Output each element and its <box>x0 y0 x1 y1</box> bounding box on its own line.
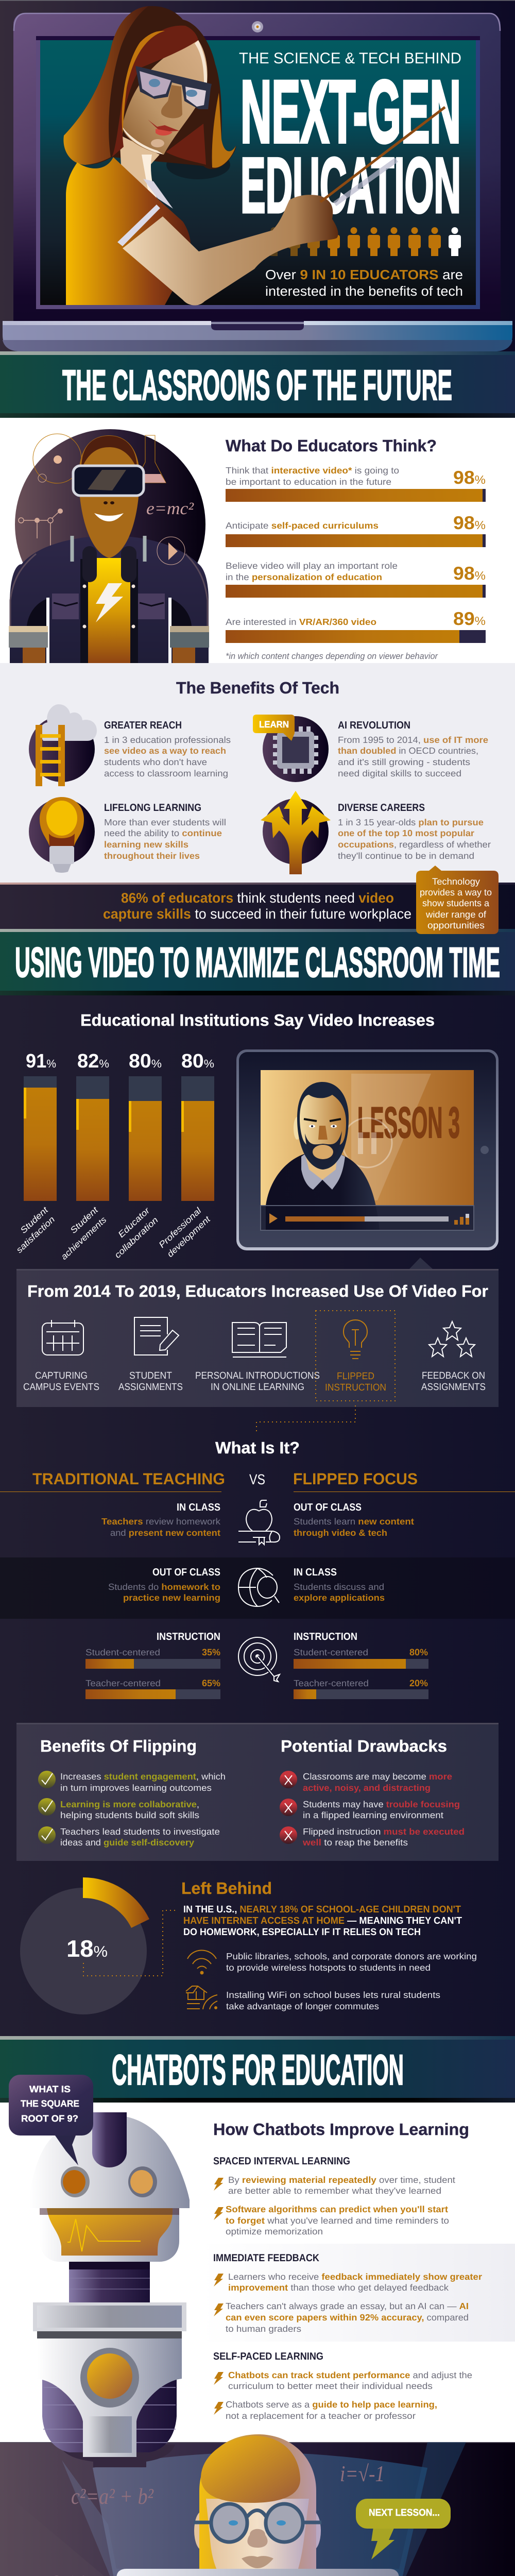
chart: flipped instruction split <box>294 1631 428 1699</box>
label: feedback on assignments <box>421 1370 486 1393</box>
icon: globe and magnifier <box>238 1568 279 1606</box>
icon: light bulb <box>29 797 95 873</box>
stat: personalization 98%: 98% <box>453 563 486 584</box>
scene: student at laptop <box>0 2442 515 2576</box>
bar chart: video increases <box>14 1050 214 1262</box>
diverse careers: occupations , regardless of whether <box>338 839 491 850</box>
label: flipped instruction: FLIPPED <box>337 1371 374 1382</box>
speech bubble: square root: WHAT IS <box>29 2084 71 2094</box>
illustration: student in VR headset <box>9 429 209 663</box>
sleeve gaps <box>27 599 47 626</box>
icon: open book <box>232 1323 286 1357</box>
header background <box>0 0 515 351</box>
row: flipped in class: Students discuss and <box>294 1582 384 1592</box>
hero title <box>239 50 461 229</box>
stat: self-paced curriculums 98%: Anticipate self-paced curriculums <box>226 520 379 531</box>
left behind text: DO HOMEWORK, ESPECIALLY IF IT RELIES ON TECH <box>183 1927 421 1938</box>
illustration: tablet with video lesson <box>236 1049 499 1250</box>
row: flipped in class: explore applications <box>294 1592 385 1603</box>
row: traditional out of class <box>108 1567 220 1603</box>
self-paced learning <box>213 2351 472 2421</box>
collar <box>33 2302 186 2331</box>
self-paced learning: Chatbots serve as a guide to help pace learning, <box>226 2399 437 2410</box>
row: flipped out of class: OUT OF CLASS <box>294 1502 362 1513</box>
left behind text: IN THE U.S., NEARLY 18% OF SCHOOL-AGE CHILDREN DON'T <box>183 1904 461 1915</box>
benefits of flipping <box>38 1737 226 1848</box>
comparison headers <box>0 1470 515 1492</box>
comparison headers: FLIPPED FOCUS <box>293 1470 418 1488</box>
label: flipped instruction <box>325 1371 386 1393</box>
comparison headers: VS <box>249 1471 265 1487</box>
chart: flipped instruction split: 20% <box>409 1678 428 1688</box>
lifelong learning: throughout their lives <box>104 851 200 861</box>
panel: from 2014 to 2019 <box>16 1258 499 1431</box>
webcam <box>252 21 263 32</box>
icon row: 9 in 10 people <box>268 227 461 256</box>
headphones <box>70 536 74 562</box>
panel: benefits and drawbacks <box>16 1723 499 1861</box>
neck <box>69 2262 150 2302</box>
illustration: robot chatbot <box>9 2075 190 2467</box>
ai revolution: AI REVOLUTION <box>338 720 410 731</box>
equations <box>29 2461 481 2576</box>
laptop back <box>116 2569 399 2576</box>
dome head <box>29 2115 190 2208</box>
icon: school wifi <box>186 1986 217 2009</box>
ai revolution: need digital skills to succeed <box>338 768 461 778</box>
long hair <box>199 2434 316 2571</box>
immediate feedback background <box>201 2244 515 2342</box>
text: wireless hotspots <box>226 1951 477 1973</box>
chart: flipped instruction split: Student-centered <box>294 1647 368 1657</box>
stat: VR/AR/360 89%: Are interested in VR/AR/360 video <box>226 617 376 627</box>
greater reach: 1 in 3 education professionals <box>104 735 231 745</box>
benefits of flipping: helping students build soft skills <box>60 1810 199 1820</box>
label: capturing campus events: CAPTURING <box>35 1370 88 1381</box>
dotted connector <box>83 1910 177 1976</box>
heading: what do educators think: What Do Educators Think? <box>226 436 437 455</box>
text: wifi on buses: Installing WiFi on school buses lets rural students <box>226 1990 440 2000</box>
jacket <box>10 536 209 663</box>
row: flipped out of class: through video & tech <box>294 1528 387 1538</box>
label: personal introductions: IN ONLINE LEARNING <box>211 1382 304 1393</box>
nose and lips <box>247 2529 268 2548</box>
greater reach <box>104 720 231 778</box>
bar chart: video increases: collaboration <box>113 1215 160 1260</box>
equations: c²=a² + b² <box>71 2484 154 2509</box>
stat: interactive video 98% <box>226 465 486 502</box>
spaced interval learning: By reviewing material repeatedly over time, student <box>228 2175 455 2185</box>
greater reach: see video as a way to reach <box>104 745 226 756</box>
chart: traditional instruction split <box>85 1631 220 1699</box>
icon: cloud and ladder <box>29 704 97 786</box>
face <box>206 2499 309 2571</box>
icon: document and pencil <box>134 1317 179 1355</box>
self-paced learning: not a replacement for a teacher or professor <box>226 2411 416 2421</box>
row: flipped in class: IN CLASS <box>294 1567 337 1578</box>
arm and hand <box>123 195 338 306</box>
icon: flipped instruction bulb <box>344 1320 367 1359</box>
label: student assignments <box>118 1370 183 1393</box>
face <box>122 40 208 155</box>
neck <box>119 135 175 242</box>
robot base shadow <box>59 2445 175 2467</box>
benefits of flipping: Benefits Of Flipping <box>40 1737 197 1755</box>
speech bubble: square root: THE SQUARE <box>21 2098 79 2109</box>
presenter <box>266 1082 380 1230</box>
row: flipped out of class <box>294 1502 414 1538</box>
potential drawbacks: well to reap the benefits <box>302 1837 408 1848</box>
callout: technology: show students a <box>422 898 490 908</box>
pointer stick <box>320 107 445 204</box>
bar chart: video increases: 82% <box>77 1050 109 1072</box>
speech bubble: square root: ROOT OF 9? <box>21 2113 78 2124</box>
label: personal introductions <box>195 1370 320 1393</box>
mouth housing and screen <box>40 2208 179 2262</box>
chart: traditional instruction split: Student-centered <box>85 1647 160 1657</box>
bar chart: video increases: Student <box>19 1205 50 1235</box>
laptop screen <box>40 40 476 305</box>
hero stat text <box>265 267 463 299</box>
immediate feedback <box>213 2252 482 2334</box>
front hair <box>112 26 198 157</box>
label: capturing campus events: CAMPUS EVENTS <box>23 1382 99 1393</box>
spaced interval learning: optimize memorization <box>226 2226 323 2236</box>
row: traditional in class: and present new content <box>110 1528 220 1538</box>
speech bubble: next lesson: NEXT LESSON... <box>369 2507 440 2518</box>
video controls <box>261 1206 474 1230</box>
icon: stars <box>429 1321 475 1357</box>
darker comparison band <box>0 1557 515 1619</box>
stat: interactive video 98%: be important to education in the future <box>226 477 391 487</box>
orange top <box>66 157 191 305</box>
cuffs <box>9 626 48 632</box>
icon: target and arrow <box>238 1637 280 1682</box>
speech bubble: square root <box>9 2075 93 2165</box>
shirt <box>80 559 138 663</box>
icon: apple on books <box>238 1500 280 1545</box>
lifelong learning: need the ability to continue <box>104 828 222 838</box>
label: flipped instruction: INSTRUCTION <box>325 1382 386 1393</box>
potential drawbacks: Potential Drawbacks <box>281 1737 447 1755</box>
dark section background <box>0 995 515 2036</box>
heading: what is it: What Is It? <box>215 1438 300 1457</box>
left behind text: Left Behind <box>181 1879 272 1897</box>
glasses <box>135 66 212 109</box>
text: wireless hotspots: Public libraries, schools, and corporate donors are working <box>226 1951 477 1961</box>
diverse careers: they'll continue to be in demand <box>338 851 474 861</box>
text: wifi on buses <box>226 1990 440 2011</box>
self-paced learning: SELF-PACED LEARNING <box>213 2351 323 2362</box>
row: flipped out of class: Students learn new content <box>294 1516 414 1527</box>
greater reach: access to classroom learning <box>104 768 228 778</box>
panel: 86% of educators: 86% of educators think students need video <box>121 890 394 906</box>
immediate feedback: to human graders <box>226 2324 301 2334</box>
potential drawbacks: Flipped instruction must be executed <box>303 1826 465 1837</box>
row: traditional out of class: practice new learning <box>123 1592 220 1603</box>
chart: traditional instruction split: 65% <box>202 1678 220 1688</box>
diverse careers: DIVERSE CAREERS <box>338 802 425 814</box>
potential drawbacks: active, noisy, and distracting <box>303 1783 431 1793</box>
potential drawbacks: Students may have trouble focusing <box>303 1799 460 1809</box>
callout: technology: Technology <box>432 876 480 887</box>
stat: personalization 98% <box>226 561 486 598</box>
bar chart: video increases: satisfaction <box>14 1214 57 1255</box>
bar chart: video increases: Professional <box>157 1205 204 1250</box>
robot chest eye <box>80 2348 139 2408</box>
stat: VR/AR/360 89%: 89% <box>453 608 486 629</box>
label: feedback on assignments: FEEDBACK ON <box>422 1370 485 1381</box>
hero title: THE SCIENCE & TECH BEHIND <box>239 50 461 67</box>
callout: technology <box>416 866 499 934</box>
panel: how chatbots improve learning <box>0 2103 515 2442</box>
stat: personalization 98%: in the personalization of education <box>226 572 382 582</box>
stat: self-paced curriculums 98%: 98% <box>453 512 486 533</box>
benefits of flipping: Increases student engagement , which <box>60 1771 226 1782</box>
diverse careers: 1 in 3 15 year-olds plan to pursue <box>338 817 484 827</box>
row: traditional out of class: Students do homework to <box>108 1582 220 1592</box>
learn bubble: LEARN <box>259 719 289 730</box>
spaced interval learning: are better able to remember what they've learned <box>228 2185 441 2196</box>
chart: flipped instruction split: INSTRUCTION <box>294 1631 357 1642</box>
heading: The Benefits Of Tech <box>176 679 339 697</box>
pockets <box>52 594 79 619</box>
speech bubble: next lesson <box>356 2499 451 2560</box>
stat: personalization 98%: Believe video will play an important role <box>226 561 398 571</box>
icon: three-way arrow <box>261 791 331 874</box>
section band: chatbots for education <box>0 2036 515 2103</box>
label: student assignments: ASSIGNMENTS <box>118 1382 183 1393</box>
ai revolution <box>338 720 488 778</box>
immediate feedback: Learners who receive feedback immediately show greater <box>228 2272 482 2282</box>
round glasses <box>194 2504 321 2542</box>
benefits of flipping: Teachers lead students to investigate <box>60 1826 220 1837</box>
bar chart: video increases: 91% <box>26 1050 56 1072</box>
hero stat text: Over 9 IN 10 EDUCATORS are <box>265 267 463 282</box>
learn bubble <box>253 715 295 741</box>
nose and lips <box>161 85 182 118</box>
illustration: teacher with pointer <box>63 6 445 306</box>
immediate feedback: Teachers can't always grade an essay, but an AI can — AI <box>226 2301 469 2311</box>
chart: flipped instruction split: 80% <box>409 1647 428 1657</box>
lifelong learning: learning new skills <box>104 839 188 850</box>
callout: technology: provides a way to <box>420 887 492 897</box>
play icon doodle <box>157 537 185 565</box>
label: personal introductions: PERSONAL INTRODUCTIONS <box>195 1370 320 1381</box>
head <box>79 435 140 558</box>
potential drawbacks: in a flipped learning environment <box>303 1810 443 1820</box>
chart: 18% pie: 18% <box>66 1935 108 1962</box>
self-paced learning: curriculum to better meet their individual needs <box>228 2381 433 2391</box>
row: traditional in class <box>101 1502 220 1538</box>
row: traditional in class: Teachers review homework <box>101 1516 220 1527</box>
benefits of flipping: ideas and guide self-discovery <box>60 1837 194 1848</box>
ai revolution: and it's still growing - students <box>338 757 470 767</box>
lifelong learning: LIFELONG LEARNING <box>104 802 201 814</box>
bar chart: video increases: development <box>165 1214 213 1259</box>
sleeve band <box>117 205 160 246</box>
potential drawbacks <box>280 1737 465 1848</box>
callout: technology: wider range of <box>425 909 487 920</box>
label: capturing campus events <box>23 1370 99 1393</box>
left behind text <box>181 1879 462 1938</box>
section band: using video <box>0 929 515 995</box>
text: wireless hotspots: to provide wireless hotspots to students in need <box>226 1962 431 1973</box>
label: student assignments: STUDENT <box>129 1370 172 1381</box>
heading: educational institutions: Educational Institutions Say Video Increases <box>80 1011 435 1029</box>
left behind text: HAVE INTERNET ACCESS AT HOME — MEANING THEY CAN'T <box>183 1916 462 1926</box>
self-paced learning: Chatbots can track student performance and adjust the <box>228 2370 472 2380</box>
text: wifi on buses: take advantage of longer commutes <box>226 2001 379 2011</box>
lifelong learning: More than ever students will <box>104 817 226 827</box>
heading: how chatbots improve learning: How Chatbots Improve Learning <box>213 2120 469 2139</box>
chart: 18% pie <box>20 1877 149 2014</box>
illustration: student face and laptop <box>116 2434 399 2576</box>
fringe <box>201 2436 300 2503</box>
chart: flipped instruction split: Teacher-centered <box>294 1678 369 1688</box>
label: feedback on assignments: ASSIGNMENTS <box>421 1382 486 1393</box>
ai revolution: than doubled in OECD countries, <box>338 745 478 756</box>
stat: VR/AR/360 89% <box>226 608 486 643</box>
stat: interactive video 98%: 98% <box>453 467 486 488</box>
panel: 86% of educators: capture skills to succeed in their future workplace <box>103 906 411 922</box>
potential drawbacks: Classrooms are may become more <box>303 1771 452 1782</box>
diverse careers: one of the top 10 most popular <box>338 828 474 838</box>
icon: calendar <box>42 1320 83 1355</box>
equations: i=√-1 <box>340 2461 385 2486</box>
stat: interactive video 98%: Think that interactive video* is going to <box>226 465 399 476</box>
heading: From 2014 To 2019, Educators Increased Use Of Video For <box>27 1282 488 1300</box>
spaced interval learning <box>213 2156 455 2236</box>
immediate feedback: IMMEDIATE FEEDBACK <box>213 2252 320 2264</box>
VR goggles <box>73 466 144 496</box>
lower body <box>37 2338 182 2457</box>
bar chart: video increases: 80% <box>181 1050 214 1072</box>
benefits of flipping: in turn improves learning outcomes <box>60 1783 212 1793</box>
dotted highlight <box>256 1311 395 1431</box>
icon: wifi <box>187 1951 216 1974</box>
callout: technology: opportunities <box>427 920 485 930</box>
row: traditional in class: IN CLASS <box>177 1502 220 1513</box>
bar chart: video increases: achievements <box>59 1215 109 1262</box>
panel: benefits of tech <box>0 663 515 883</box>
legs <box>42 2379 177 2452</box>
illustration: student in VR headset: e=mc² <box>146 499 194 518</box>
immediate feedback: can even score papers within 92% accuracy, compared <box>226 2312 469 2323</box>
bar chart: video increases: 80% <box>129 1050 162 1072</box>
pause button <box>342 1118 392 1167</box>
row: flipped in class <box>294 1567 385 1603</box>
icon: AI chip <box>253 715 329 782</box>
laptop base <box>3 321 512 351</box>
spaced interval learning: Software algorithms can predict when you'll start <box>226 2204 448 2214</box>
doodles <box>33 434 166 483</box>
row: traditional out of class: OUT OF CLASS <box>152 1567 220 1578</box>
spaced interval learning: to forget what you've learned and time reminders to <box>226 2215 449 2226</box>
ears <box>194 2511 211 2550</box>
section band: classrooms of the future <box>0 351 515 418</box>
immediate feedback: improvement than those who get delayed feedback <box>228 2282 449 2293</box>
bar chart: video increases: Educator <box>116 1205 152 1240</box>
stat: self-paced curriculums 98% <box>226 512 486 547</box>
lifelong learning <box>104 802 226 861</box>
panel: what do educators think <box>0 418 515 663</box>
chart: traditional instruction split: Teacher-centered <box>85 1678 161 1688</box>
greater reach: students who don't have <box>104 757 207 767</box>
robot eyes <box>61 2166 157 2197</box>
panel: 86% of educators <box>0 883 515 929</box>
benefits of flipping: Learning is more collaborative , <box>60 1799 199 1809</box>
ai revolution: From 1995 to 2014, use of IT more <box>338 735 488 745</box>
greater reach: GREATER REACH <box>104 720 182 731</box>
diverse careers <box>338 802 491 861</box>
spaced interval learning: SPACED INTERVAL LEARNING <box>213 2156 350 2167</box>
chart: traditional instruction split: INSTRUCTION <box>157 1631 220 1642</box>
hero stat text: interested in the benefits of tech <box>265 283 463 299</box>
chart: traditional instruction split: 35% <box>202 1647 220 1657</box>
comparison headers: TRADITIONAL TEACHING <box>32 1470 225 1488</box>
footnote: *in which content changes depending on viewer behavior <box>226 651 438 661</box>
bar chart: video increases: Student <box>68 1205 100 1235</box>
laptop illustration <box>3 13 512 351</box>
